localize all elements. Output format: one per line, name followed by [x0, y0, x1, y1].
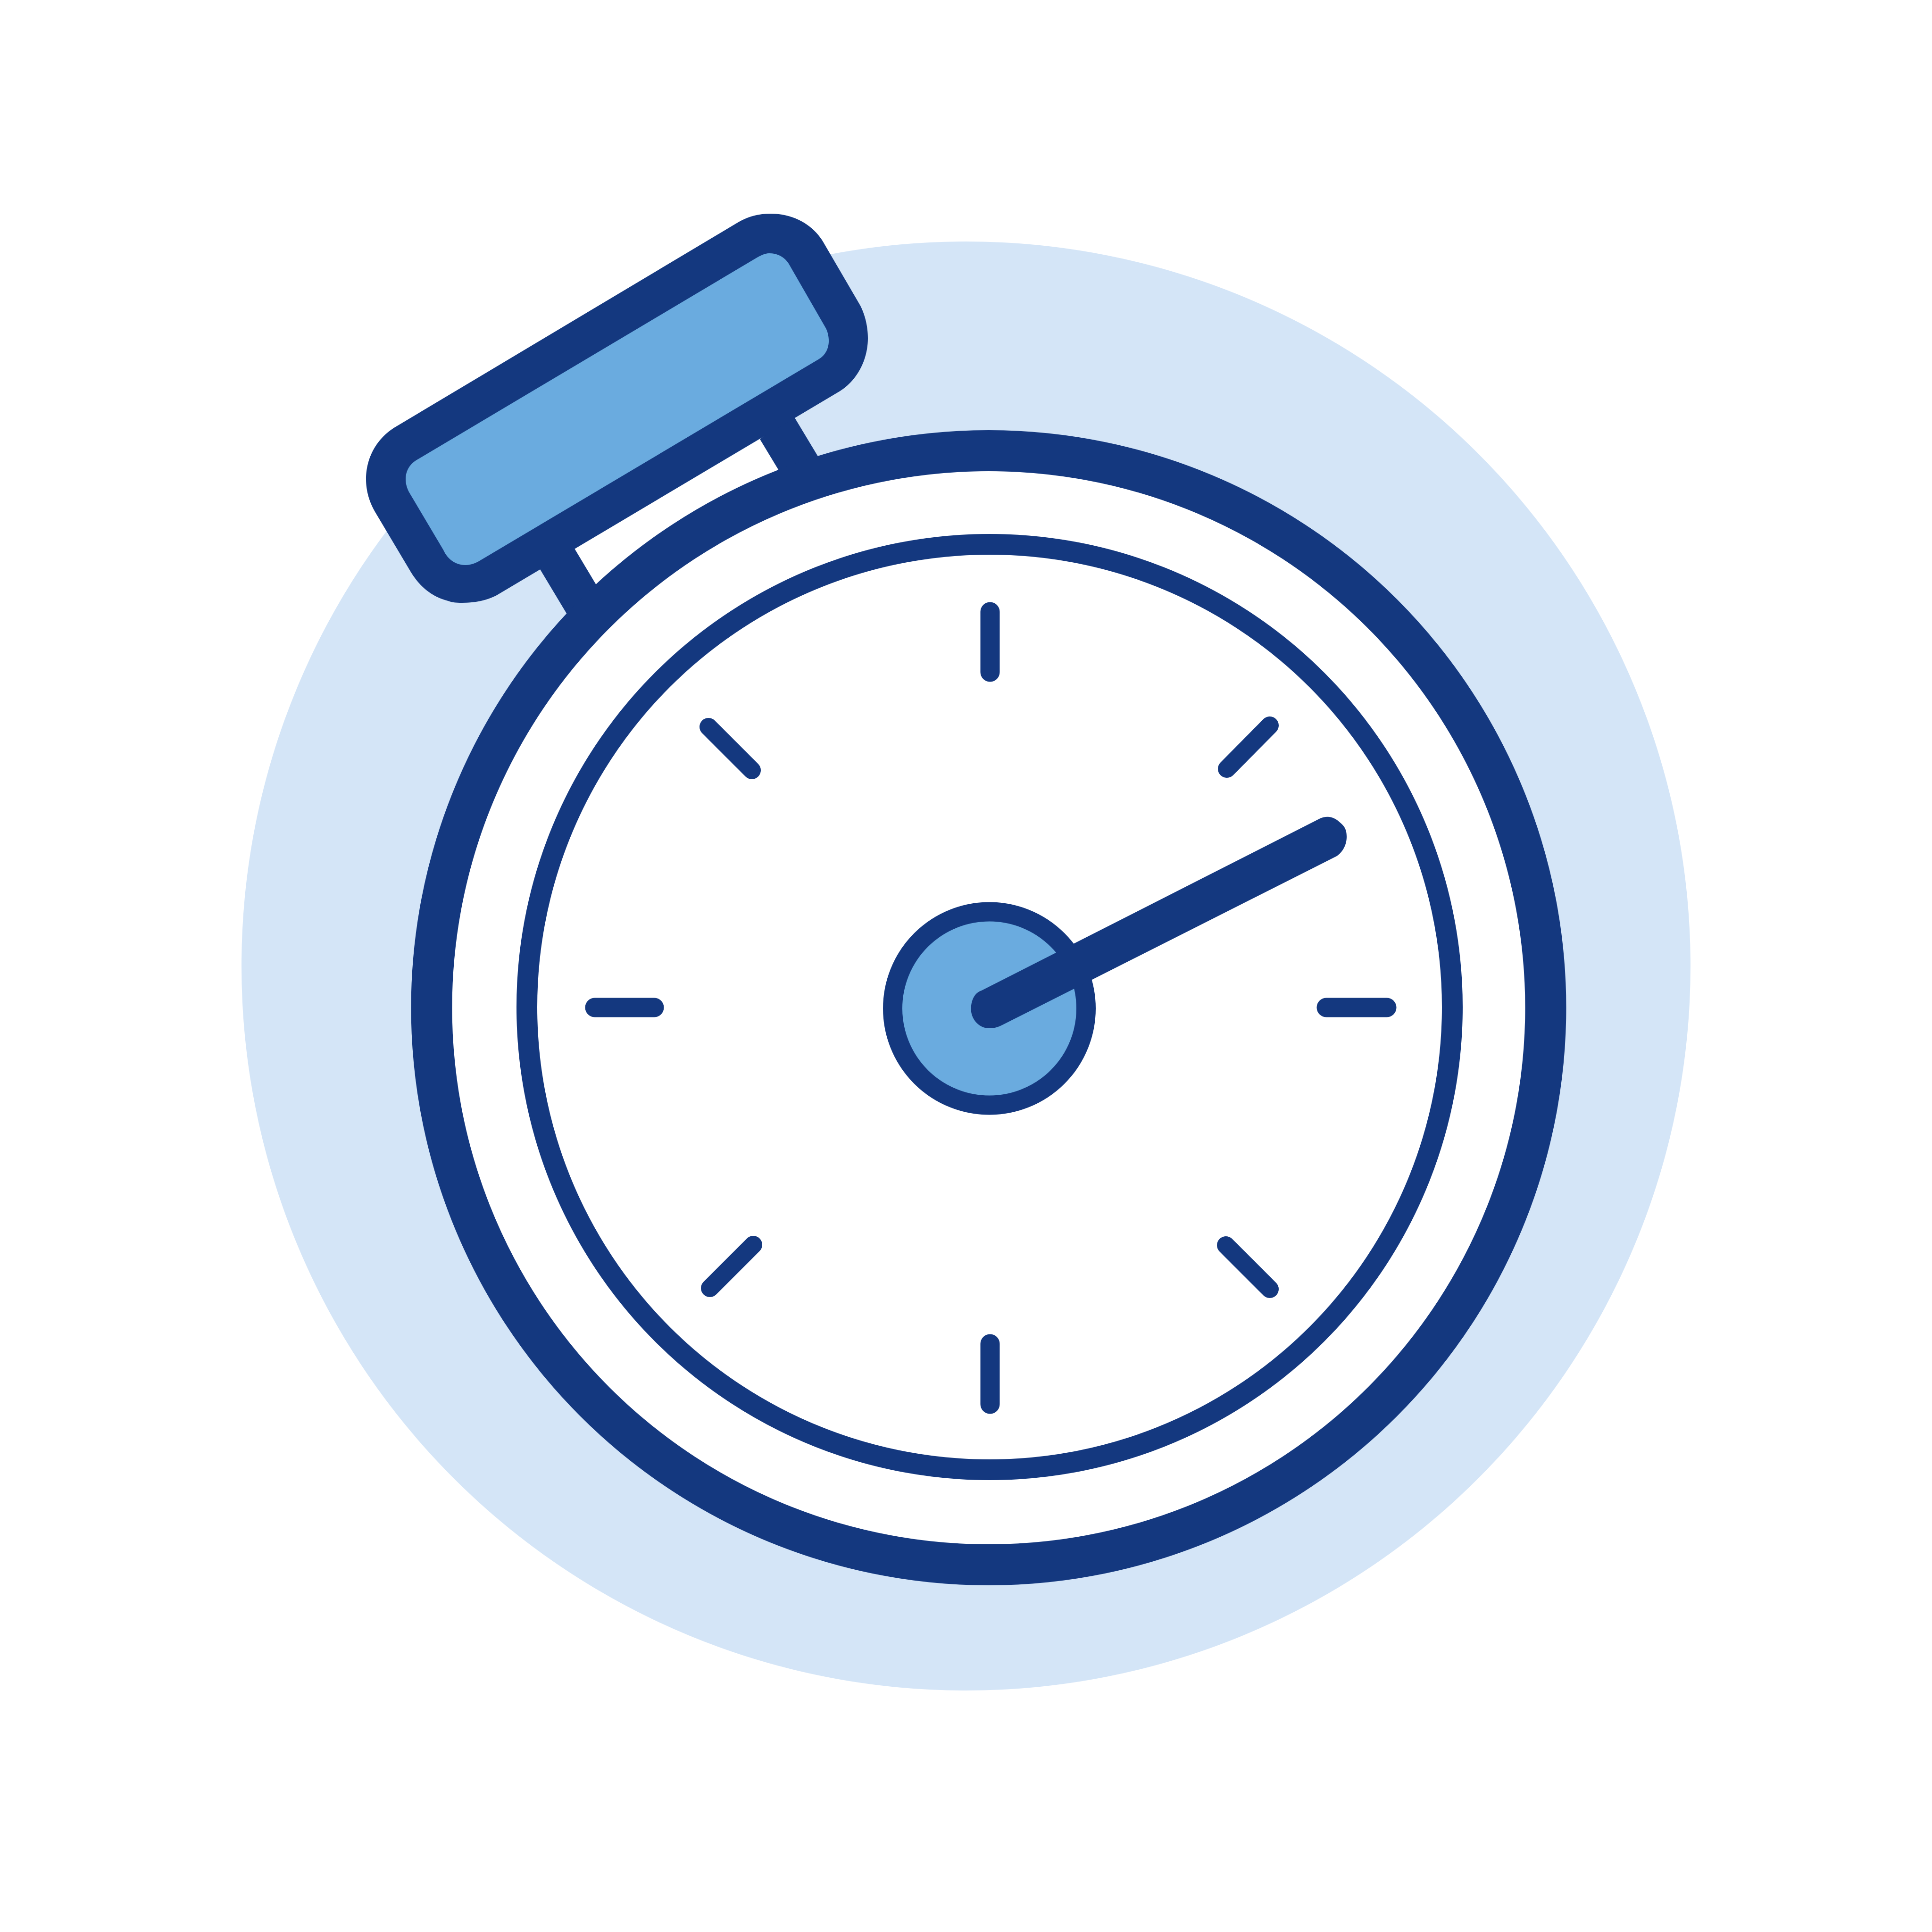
- tick: 12 o'clock: [980, 612, 1000, 672]
- tick: 6 o'clock: [980, 1344, 1000, 1404]
- tick: 4:30 position: [1226, 1245, 1270, 1289]
- background circle: [242, 242, 1690, 1690]
- clock hand: [971, 817, 1347, 1028]
- tick: 3 o'clock: [1326, 998, 1387, 1017]
- tick: 9 o'clock: [595, 998, 654, 1017]
- center hub: [892, 912, 1086, 1105]
- tick: 7:30 position: [710, 1245, 753, 1288]
- handle / crown: [366, 214, 868, 603]
- connector between handle and watch body: [540, 415, 835, 644]
- tick marks: [595, 612, 1387, 1404]
- watch body outer ring: [432, 451, 1546, 1565]
- tick: 10:30 position: [708, 727, 752, 770]
- tick: 1:30 position: [1227, 725, 1270, 769]
- watch dial inner ring: [527, 544, 1452, 1470]
